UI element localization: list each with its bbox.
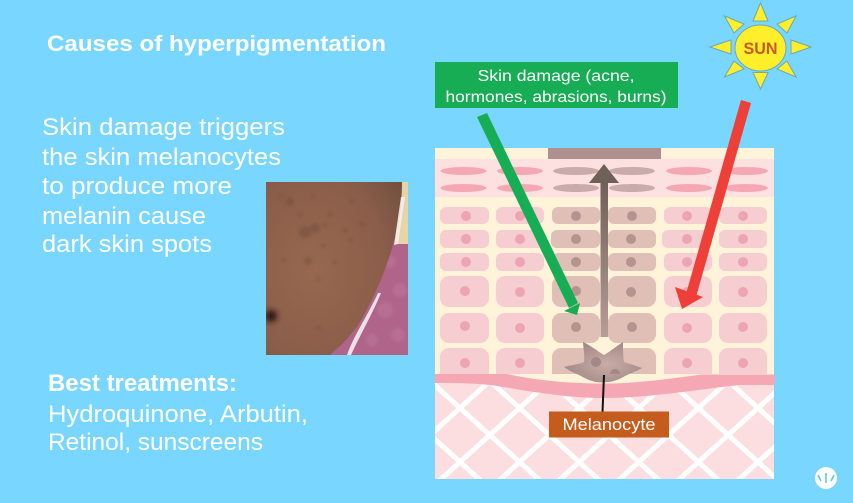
melanocyte cell: [564, 342, 642, 382]
icon: sun: [710, 3, 811, 89]
text block: best treatments: [48, 370, 308, 456]
line: melanocyte pointer: [602, 375, 604, 412]
diagram: skin cross-section: [435, 100, 775, 479]
text block: explanation: [42, 114, 285, 258]
text block: explanation: the skin melanocytes: [42, 144, 281, 171]
text block: explanation: Skin damage triggers: [42, 114, 285, 141]
label: skin damage causes: hormones, abrasions, burns): [446, 89, 666, 106]
sun label: SUN: [744, 39, 778, 58]
arrow: green skin damage: [477, 113, 580, 315]
cell nuclei: [460, 211, 748, 368]
text block: best treatments: Hydroquinone, Arbutin,: [48, 401, 308, 428]
cream strip below cells: [435, 374, 774, 394]
arrow: melanin moving up: [589, 164, 619, 337]
outer skin layer band: [435, 159, 774, 197]
icon: logo badge: [815, 467, 837, 489]
dermis lattice: [435, 376, 774, 479]
text block: best treatments: Retinol, sunscreens: [48, 429, 263, 456]
arrow: red sun exposure: [675, 100, 751, 309]
pink skin cells: [440, 207, 767, 384]
label: skin damage causes: [435, 62, 678, 108]
label: melanocyte: Melanocyte: [562, 415, 656, 434]
photo: cheek with dark spots: [265, 182, 408, 355]
title: Causes of hyperpigmentation: [47, 31, 386, 56]
sun rays: [710, 3, 811, 89]
sun disc: [735, 25, 786, 71]
label: skin damage causes: Skin damage (acne,: [478, 68, 634, 85]
flattened surface cells: [440, 167, 768, 192]
label: melanocyte: [549, 412, 669, 438]
skin background layer: [435, 148, 774, 380]
dark surface patch: [548, 148, 661, 159]
text block: best treatments: Best treatments:: [48, 370, 237, 397]
text block: explanation: melanin cause: [42, 203, 206, 230]
text block: explanation: to produce more: [42, 173, 232, 200]
text block: explanation: dark skin spots: [42, 231, 212, 258]
basement membrane wave: [435, 374, 775, 398]
dermis layer: [435, 376, 774, 479]
pigmented skin cells: [551, 207, 656, 384]
